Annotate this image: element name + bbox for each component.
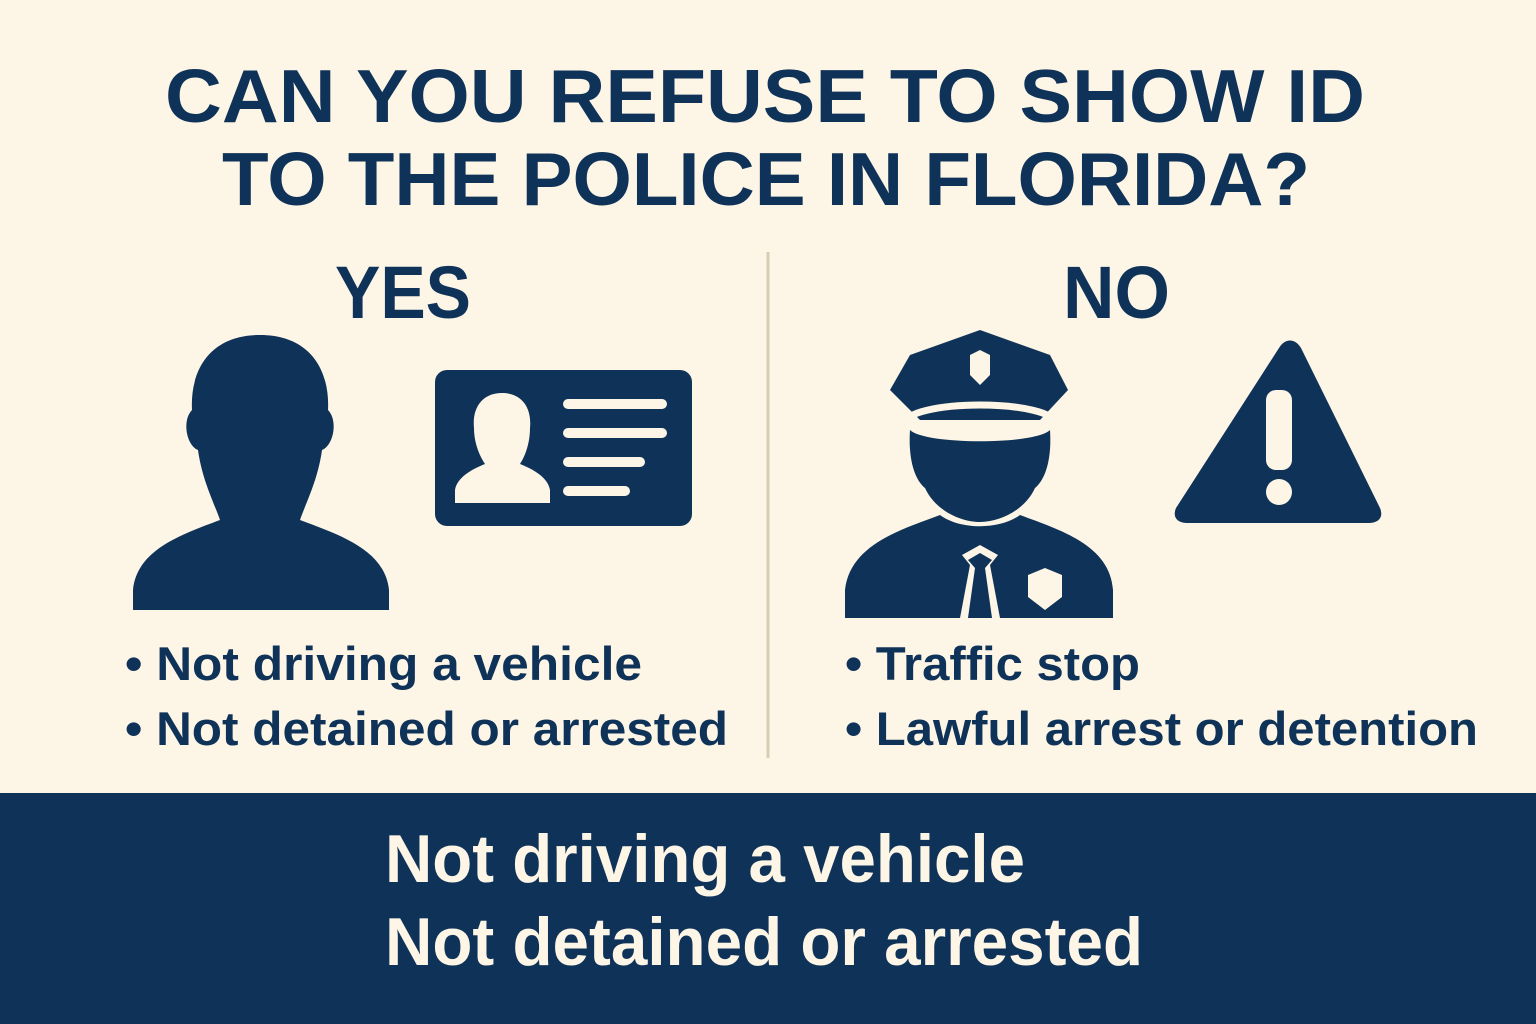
bottom banner — [0, 793, 1536, 1024]
bottom banner: Not detained or arrested — [385, 904, 1143, 980]
heading: NO: NO — [1063, 251, 1170, 334]
bullets: yes — [125, 637, 728, 755]
title — [165, 54, 1365, 221]
icon: ID card — [435, 370, 692, 526]
bullets: no: • Traffic stop — [845, 637, 1140, 690]
icon: person silhouette — [133, 335, 389, 610]
bottom banner: Not driving a vehicle — [385, 821, 1025, 897]
title: TO THE POLICE IN FLORIDA? — [222, 137, 1310, 221]
panel: no — [845, 251, 1478, 755]
icon: police officer — [845, 330, 1113, 618]
bullets: yes: • Not detained or arrested — [125, 702, 728, 755]
bullets: no: • Lawful arrest or detention — [845, 702, 1478, 755]
icon: warning triangle — [1175, 340, 1381, 523]
heading: YES: YES — [335, 251, 471, 334]
title: CAN YOU REFUSE TO SHOW ID — [165, 54, 1365, 138]
panel: yes — [125, 251, 728, 755]
bullets: yes: • Not driving a vehicle — [125, 637, 642, 690]
bullets: no — [845, 637, 1478, 755]
